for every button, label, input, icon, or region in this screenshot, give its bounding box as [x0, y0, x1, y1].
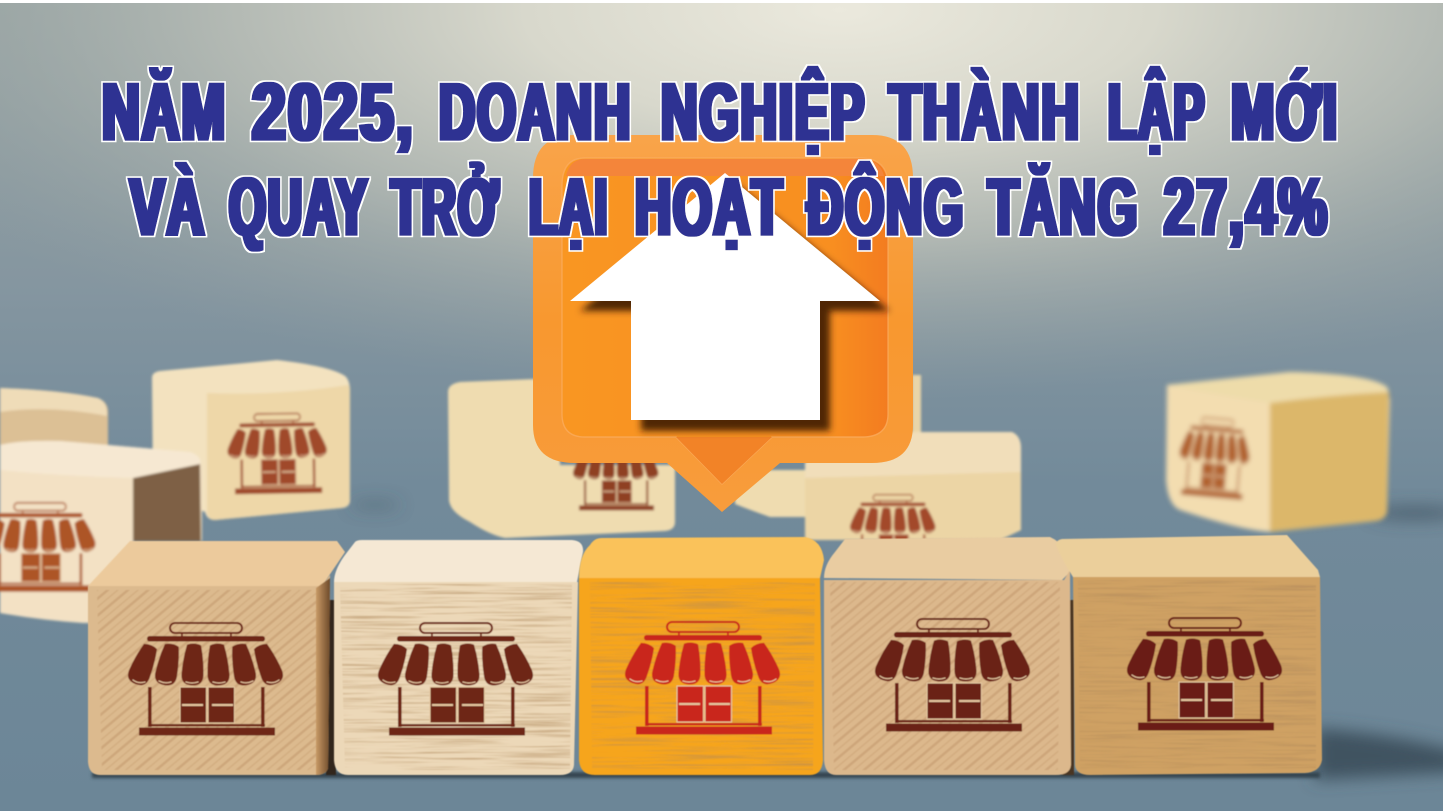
block: middle left with shop icon	[0, 441, 202, 623]
speech bubble	[533, 135, 913, 512]
title line 1: NGHIỆP	[661, 66, 866, 158]
block: upper left with shop icon	[152, 360, 350, 520]
title line 1: DOANH	[439, 68, 632, 158]
title line 2: TRỞ	[391, 162, 500, 252]
title line 2: VÀ	[130, 162, 206, 252]
title line 2: LẠI	[529, 162, 609, 252]
title line 2	[130, 162, 1329, 252]
block 2	[334, 540, 583, 775]
block 1	[88, 541, 345, 775]
title	[102, 66, 1339, 252]
title line 2: 27,4%	[1164, 162, 1329, 252]
block 5	[1056, 535, 1322, 775]
arrow shadow	[580, 183, 890, 431]
title line 2: TĂNG	[988, 162, 1139, 252]
floor contact shadow under front blocks	[92, 772, 1320, 778]
title line 1	[102, 66, 1339, 158]
title line 2: ĐỘNG	[807, 162, 965, 252]
block 3: highlighted orange	[579, 537, 824, 775]
foreground wooden blocks	[88, 535, 1322, 775]
block 4	[824, 537, 1074, 775]
title line 1: NĂM	[102, 68, 227, 158]
block: far left	[0, 388, 108, 445]
block: behind bubble right with shop icon	[805, 432, 1021, 564]
block: far right with shop icon	[1166, 372, 1390, 532]
blurred background blocks	[0, 360, 1021, 623]
title line 1: 2025,	[252, 68, 415, 158]
icon: white up arrow	[570, 173, 880, 420]
title line 1: THÀNH	[889, 68, 1081, 158]
block: behind bubble left	[448, 378, 675, 538]
floor shadows	[350, 500, 1443, 780]
title line 2: QUAY	[229, 162, 369, 252]
title line 1: MỚI	[1231, 66, 1339, 158]
title line 2: HOẠT	[635, 162, 784, 252]
block: behind bubble right edge	[912, 375, 921, 432]
title line 1: LẬP	[1108, 66, 1206, 158]
block: behind bubble centre	[735, 470, 808, 517]
